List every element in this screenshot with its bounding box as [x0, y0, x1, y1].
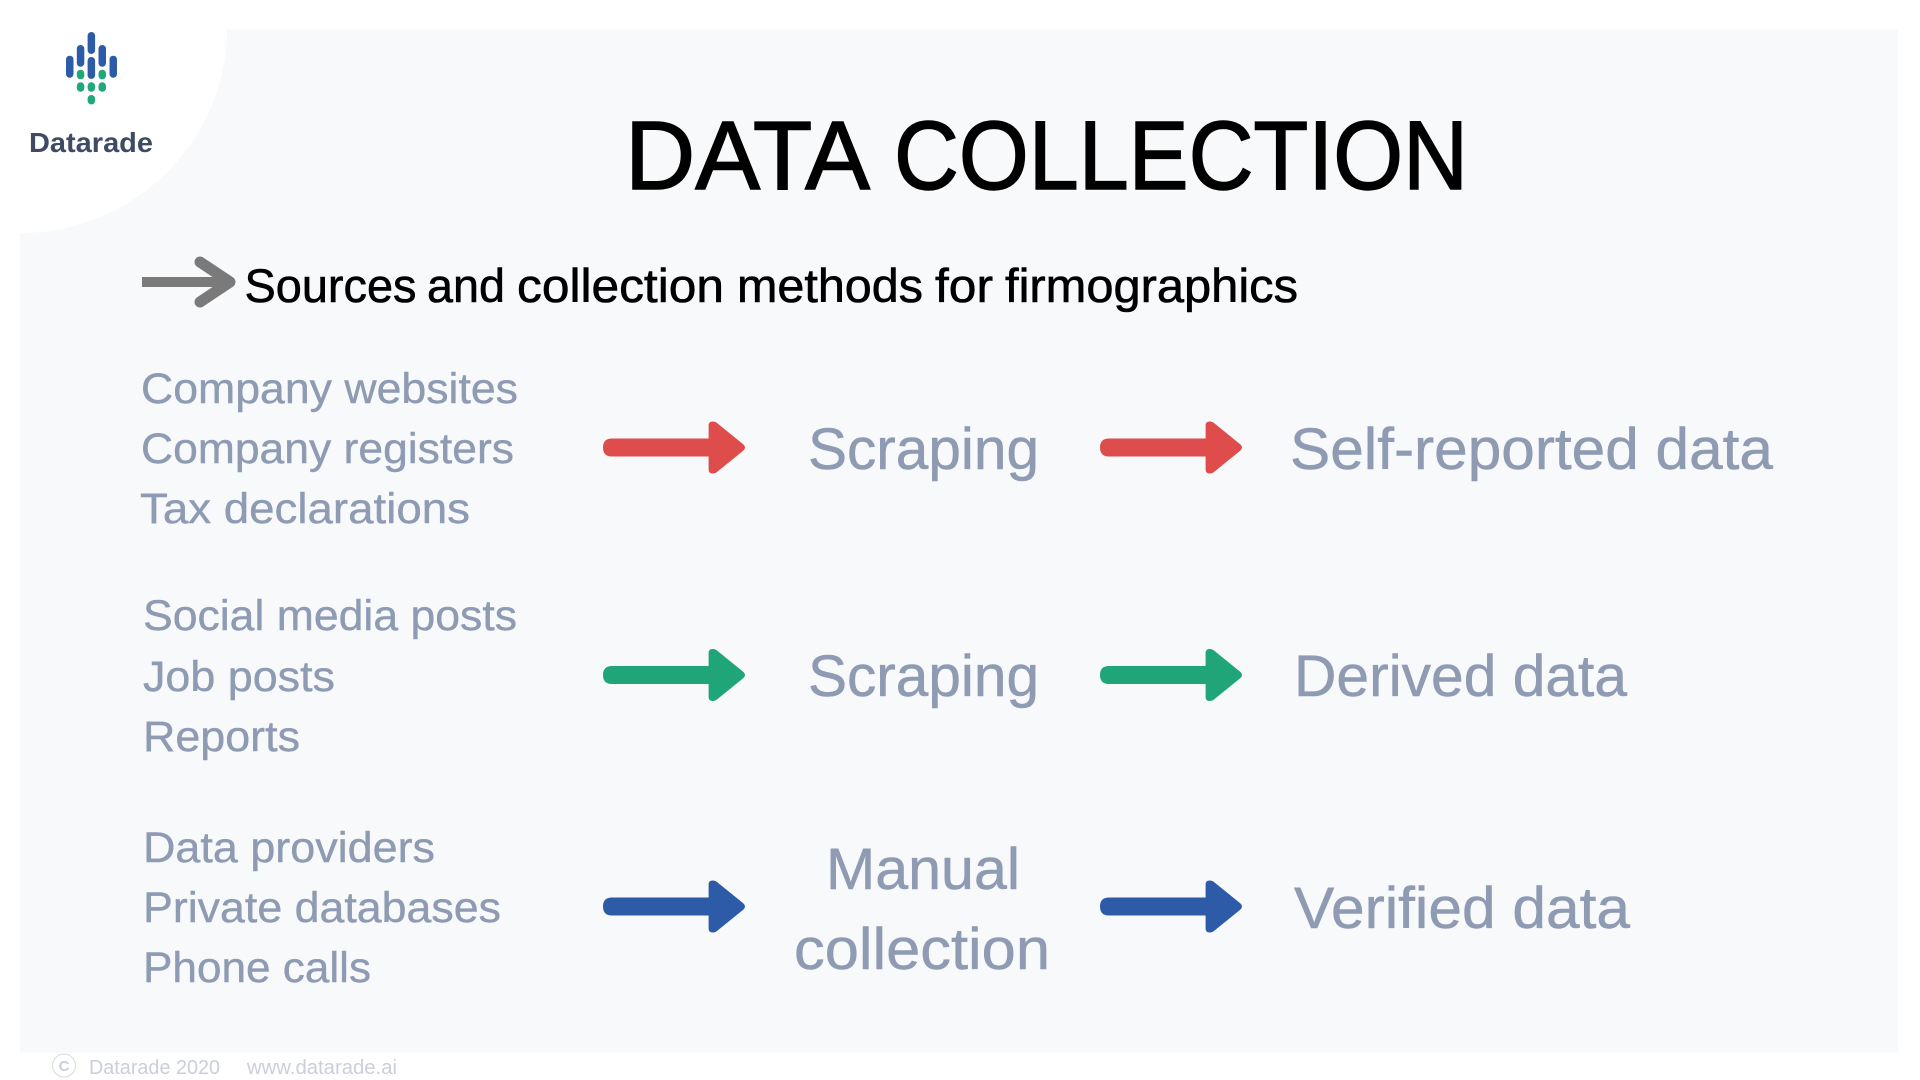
method: scraping: Scraping [808, 417, 1039, 482]
result: derived data: Derived data [1294, 644, 1628, 709]
icon: copyright: C [59, 1058, 70, 1075]
result: verified data: Verified data [1294, 876, 1631, 941]
source list 2 [143, 592, 517, 761]
source list 3: Data providers [143, 824, 435, 872]
source list 2: Job posts [143, 653, 335, 701]
row 3: verified data [143, 824, 1631, 992]
source list 1: Company registers [141, 425, 514, 473]
footer: website: www.datarade.ai [246, 1057, 397, 1079]
method: manual collection: Manual [826, 837, 1020, 902]
source list 3: Private databases [143, 884, 501, 932]
arrow: green to method [603, 649, 745, 701]
icon: copyright [52, 1054, 76, 1077]
arrow: red to result [1100, 422, 1242, 474]
arrow: red to method [603, 422, 745, 474]
subtitle: firmographics [1005, 259, 1298, 312]
arrow: blue to result [1100, 880, 1242, 932]
row 2: derived data [143, 592, 1628, 761]
subtitle: methods [737, 259, 923, 312]
source list 2: Reports [143, 713, 300, 761]
method: scraping: Scraping [808, 644, 1039, 709]
title: DATA [625, 101, 870, 210]
method: manual collection [794, 837, 1050, 982]
arrow: blue to method [603, 880, 745, 932]
subtitle: collection [517, 259, 724, 312]
source list 1: Company websites [141, 365, 518, 413]
source list 1: Tax declarations [140, 485, 470, 533]
subtitle: for [935, 259, 993, 312]
arrow: green to result [1100, 649, 1242, 701]
icon: logo dots [77, 70, 106, 104]
icon: logo bars [66, 32, 117, 79]
footer: copyright text: Datarade 2020 [89, 1057, 220, 1079]
logo: Datarade [29, 32, 153, 158]
footer [52, 1054, 397, 1079]
result: self-reported data: Self-reported data [1290, 417, 1774, 482]
method: manual collection: collection [794, 917, 1050, 982]
source list 1 [140, 365, 518, 533]
source list 3: Phone calls [143, 944, 371, 992]
subtitle: Sources [244, 259, 416, 312]
subtitle [244, 259, 1298, 312]
icon: gray arrow [142, 262, 230, 302]
title: COLLECTION [894, 101, 1468, 210]
logo wordmark: Datarade [29, 127, 153, 158]
title [625, 101, 1468, 210]
subtitle: and [427, 259, 505, 312]
row 1: self-reported data [140, 365, 1774, 533]
source list 3 [143, 824, 501, 992]
source list 2: Social media posts [143, 592, 517, 640]
